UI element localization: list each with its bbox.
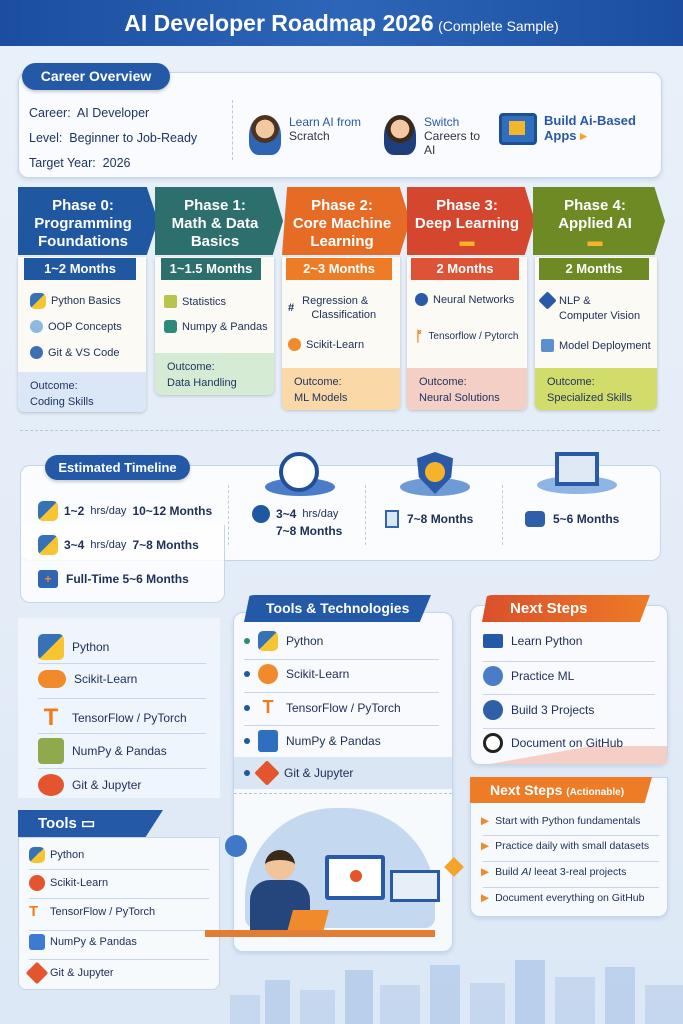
phase 4 header: ▬ [588, 233, 602, 250]
panel: tools & technologies: TensorFlow / PyTorch [286, 700, 401, 714]
panel: tools: Python [50, 849, 84, 861]
phase 0: Git & VS Code [48, 346, 120, 358]
months [24, 258, 136, 280]
tools & technologies heading: Tools & Technologies [266, 600, 409, 616]
column: 3-4 hrs: 3~4 [276, 507, 296, 521]
phase 1 header: Basics [191, 233, 239, 250]
phase 4: NLP & [559, 295, 591, 307]
phase 0: Coding Skills [30, 396, 94, 408]
panel: left tools list: Scikit-Learn [74, 672, 137, 686]
tools heading [18, 810, 163, 837]
goal: build apps: Apps ▸ [544, 128, 587, 143]
phase 1 [154, 187, 283, 398]
column: 7-8 months: 7~8 Months [407, 512, 473, 526]
phase 1 header [155, 187, 283, 255]
phase 4 [533, 187, 665, 412]
phase 3: ᚩ [415, 328, 423, 344]
phase 1: Numpy & Pandas [182, 320, 268, 332]
phase 4 header [533, 187, 665, 255]
timeline options left: 1~2 10~12 Months [64, 504, 212, 518]
goal: switch careers: Switch [424, 115, 459, 129]
city skyline [230, 960, 683, 1024]
career details: Career: AI Developer [29, 106, 149, 120]
tools & technologies heading [244, 595, 431, 622]
phase 3 header: Deep Learning [415, 215, 519, 232]
panel: next steps: Document on GitHub [511, 736, 623, 750]
phase 2: Classification [311, 309, 376, 321]
panel: tools & technologies: Git & Jupyter [284, 766, 353, 780]
panel: next steps: Build 3 Projects [511, 703, 594, 717]
panel: next steps actionable: ▶ [481, 840, 489, 852]
panel: estimated timeline: 3~4 7~8 Months [64, 538, 199, 552]
column: 7-8 months [385, 510, 473, 528]
panel: next steps: Learn Python [511, 634, 582, 648]
panel: tools: NumPy & Pandas [50, 936, 137, 948]
panel: tools & technologies: Python [286, 634, 323, 648]
phase 0 header: Programming [34, 215, 132, 232]
tools heading: Tools ▭ [38, 815, 95, 832]
timeline options left [38, 501, 212, 521]
panel: next steps actionable: Build AI leeat 3-real projects [495, 866, 626, 878]
phase 3: Tensorflow / Pytorch [428, 330, 518, 342]
panel: tools: Scikit-Learn [50, 877, 108, 889]
timeline options left: hrs/day [90, 505, 126, 517]
panel: estimated timeline: 7~8 Months [276, 524, 342, 538]
phase 3: Neural Networks [433, 294, 514, 306]
panel: tools: T [29, 903, 38, 920]
phase 4 header: Applied AI [558, 215, 632, 232]
phase 3 header: Phase 3: [436, 197, 498, 214]
next steps actionable heading [470, 777, 652, 803]
panel: left tools list: T [44, 704, 58, 731]
panel: left tools list: Python [72, 640, 109, 654]
panel: next steps: Practice ML [511, 669, 574, 683]
phase 4: 2 Months [565, 261, 623, 276]
panel: next steps actionable [470, 777, 668, 917]
phase 0 header: Foundations [38, 233, 128, 250]
phase 4 header: Phase 4: [564, 197, 626, 214]
column: 5-6 months [525, 511, 619, 527]
months: 1~2 Months [44, 261, 116, 276]
panel: next steps actionable: Practice daily with small datasets [495, 840, 649, 852]
phase 3 [406, 187, 533, 412]
icon: shield clock [400, 452, 470, 496]
panel: left tools list: NumPy & Pandas [72, 744, 167, 758]
phase 1: Data Handling [167, 377, 237, 389]
phase 0: Outcome: [30, 380, 78, 392]
panel: estimated timeline: + [44, 572, 52, 586]
goal: learn AI: Learn AI from [289, 115, 361, 129]
career details [29, 106, 198, 170]
phase 3 header: ▬ [460, 233, 474, 250]
phase 0: Python Basics [51, 295, 121, 307]
phase 2: 2~3 Months [303, 261, 375, 276]
phase 2: Scikit-Learn [306, 338, 364, 350]
title bar [0, 0, 683, 46]
career overview pill: Career Overview [41, 68, 151, 84]
phase 4: Computer Vision [559, 310, 640, 322]
career details: Target Year: 2026 [29, 156, 130, 170]
phase 1 header: Phase 1: [184, 197, 246, 214]
panel: tools [18, 837, 220, 990]
phase 3: 2 Months [436, 261, 494, 276]
phase 3: Neural Solutions [419, 392, 500, 404]
panel: next steps [470, 605, 668, 765]
phase 2 [280, 187, 407, 412]
phase 1: 1~1.5 Months [170, 261, 252, 276]
phase 0 header [18, 187, 158, 255]
next steps actionable heading: Next Steps (Actionable) [490, 782, 624, 798]
panel: next steps actionable: ▶ [481, 866, 489, 878]
panel: estimated timeline [20, 465, 661, 603]
phase 2: Outcome: [294, 376, 342, 388]
panel: estimated timeline: Full-Time 5~6 Months [66, 572, 189, 586]
panel: career overview [18, 72, 662, 178]
estimated timeline pill: Estimated Timeline [58, 460, 177, 475]
panel: next steps actionable: Document everything on GitHub [495, 892, 644, 904]
phase 1: Statistics [182, 296, 226, 308]
phase 2 header: Learning [310, 233, 374, 250]
phase 1: Outcome: [167, 361, 215, 373]
phase 4: Model Deployment [559, 340, 651, 352]
panel: tools: TensorFlow / PyTorch [50, 906, 155, 918]
illustration: developer at desk [205, 808, 464, 937]
icon: monitor [537, 452, 617, 494]
phase 4: Outcome: [547, 376, 595, 388]
panel: left tools list: Git & Jupyter [72, 778, 141, 792]
panel: tools & technologies: Scikit-Learn [286, 667, 349, 681]
column: 3-4 hrs [252, 505, 338, 523]
goal: build apps [499, 113, 636, 145]
panel: tools: Git & Jupyter [50, 967, 114, 979]
goal: learn AI: Scratch [289, 129, 330, 143]
goal: switch careers [384, 115, 480, 157]
phase 0 [16, 187, 155, 414]
phase 3: Outcome: [419, 376, 467, 388]
panel: tools & technologies: NumPy & Pandas [286, 734, 381, 748]
next steps heading [482, 595, 650, 622]
panel: left tools list [18, 618, 220, 798]
phase 2 header [282, 187, 410, 255]
panel: next steps actionable: ▶ [481, 815, 489, 827]
panel: next steps actionable: Start with Python fundamentals [495, 815, 640, 827]
phase 2: # [288, 302, 294, 314]
estimated timeline pill [45, 455, 190, 480]
panel: tools & technologies [233, 612, 453, 952]
phase 2 header: Core Machine [293, 215, 391, 232]
phase 2: ML Models [294, 392, 347, 404]
phase 2: Regression & [302, 295, 368, 307]
panel: tools & technologies: T [262, 697, 274, 717]
career details: Level: Beginner to Job-Ready [29, 131, 197, 145]
goal: build apps: Build Ai-Based [544, 113, 636, 128]
column: 3-4 hrs: hrs/day [302, 508, 338, 520]
phase 2 header: Phase 2: [311, 197, 373, 214]
phase 0: OOP Concepts [48, 320, 122, 332]
goal: switch careers: Careers to AI [424, 129, 480, 157]
phase 0 header: Phase 0: [52, 197, 114, 214]
title bar: AI Developer Roadmap 2026 (Complete Sample) [124, 10, 559, 36]
panel: left tools list: TensorFlow / PyTorch [72, 711, 187, 725]
panel: estimated timeline: hrs/day [90, 539, 126, 551]
career overview pill [22, 63, 170, 90]
next steps heading: Next Steps [510, 600, 588, 617]
phase 3 header [407, 187, 535, 255]
panel: next steps actionable: ▶ [481, 892, 489, 904]
phase 1 header: Math & Data [172, 215, 258, 232]
phase 4: Specialized Skills [547, 392, 632, 404]
goal: learn AI [249, 115, 361, 155]
icon: alarm clock [265, 452, 335, 496]
column: 5-6 months: 5~6 Months [553, 512, 619, 526]
